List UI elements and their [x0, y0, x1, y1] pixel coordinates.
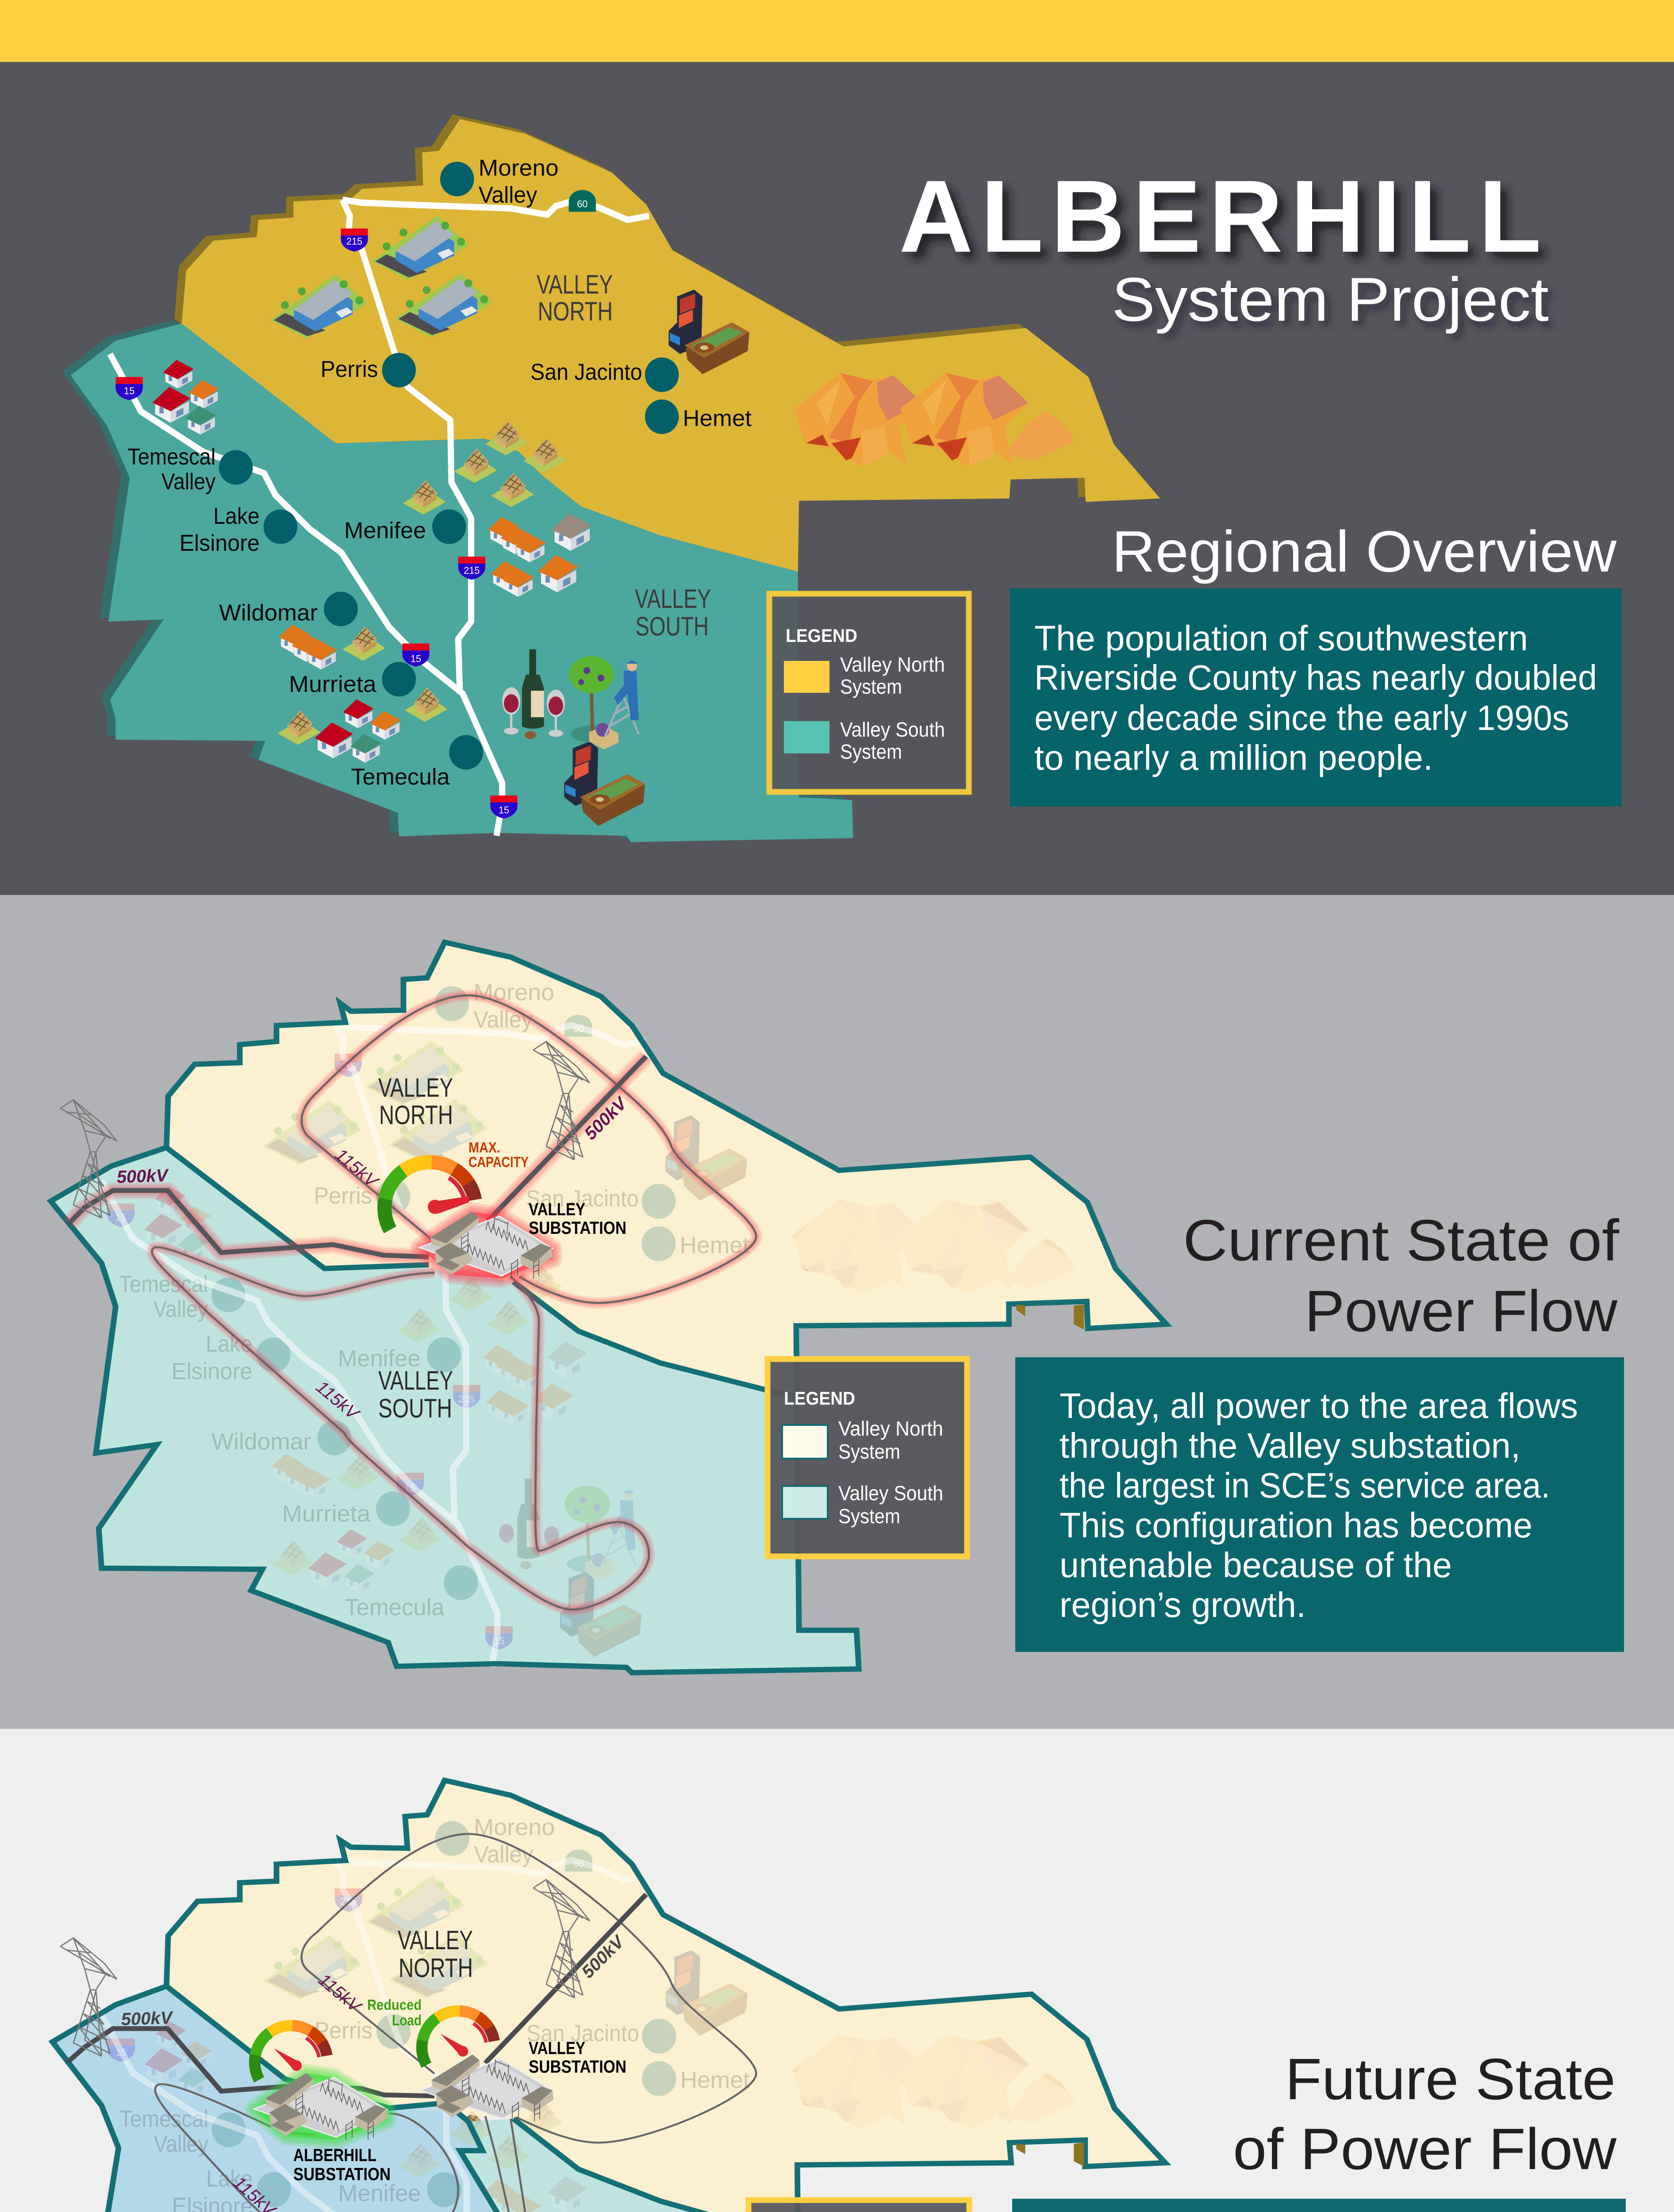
heading: future state — [1233, 2047, 1617, 2181]
faded base map icons and city labels: 15 — [116, 2047, 127, 2058]
highway shield numbers: 15 — [499, 804, 509, 816]
alberhill substation glow — [254, 2073, 387, 2140]
faded base map icons and city labels: San Jacinto — [526, 1186, 639, 1212]
line voltage labels: 115kV — [331, 1145, 382, 1192]
transmission tower west — [60, 1100, 117, 1218]
text block: current state: This configuration has become — [1060, 1505, 1532, 1545]
city labels — [127, 154, 752, 790]
text block: current state — [1015, 1357, 1624, 1652]
transmission tower west — [60, 1938, 117, 2056]
legend: regional overview: Valley North — [840, 653, 945, 676]
reduced load label: Reduced — [367, 1997, 422, 2013]
substation label: SUBSTATION — [529, 1218, 626, 1238]
text block: current state: the largest in SCE’s service area. — [1060, 1466, 1550, 1505]
city labels: Hemet — [683, 405, 752, 431]
legend: regional overview — [769, 594, 969, 792]
top yellow band — [0, 0, 1674, 62]
faded base map icons and city labels: Temecula — [345, 1595, 445, 1621]
map regions base — [51, 942, 1166, 1673]
faded base map icons and city labels: Menifee — [338, 1346, 420, 1372]
faded base map icons and city labels: 15 — [115, 1212, 126, 1223]
valley substation label — [529, 2039, 626, 2077]
faded base map icons and city labels: Moreno — [474, 1814, 555, 1840]
heading: future state: Future State — [1285, 2047, 1616, 2112]
title — [899, 159, 1549, 334]
faded base map icons and city labels: Perris — [314, 1183, 372, 1209]
map region shadows — [62, 115, 1153, 839]
faded base map icons and city labels: 60 — [573, 1858, 584, 1869]
legend: current state: Valley South — [838, 1482, 943, 1505]
region labels: NORTH — [538, 296, 613, 326]
faded base map icons and city labels: Perris — [315, 2018, 372, 2044]
faded base map icons and city labels: Lake — [206, 1331, 252, 1357]
highway shield numbers — [124, 198, 587, 816]
highways — [110, 200, 649, 836]
region labels: VALLEY — [635, 584, 711, 614]
region outlines — [53, 1780, 1165, 2212]
region labels — [537, 269, 711, 641]
legend: regional overview: LEGEND — [786, 625, 857, 646]
500kV lines — [68, 1894, 646, 2096]
faded base map icons and city labels: Elsinore — [172, 1359, 252, 1385]
faded base map icons and city labels — [107, 979, 1076, 1657]
faded base map icons and city labels — [108, 1814, 1077, 2212]
faded base map icons and city labels: 215 — [340, 1061, 356, 1072]
faded base map icons and city labels: Valley — [154, 2131, 208, 2157]
text block: regional overview: The population of southwestern — [1034, 618, 1528, 658]
region labels: VALLEY — [378, 1366, 453, 1395]
city labels: Valley — [479, 182, 537, 207]
title line: Alberhill: ALBERHILL — [899, 159, 1541, 274]
regional overview map — [62, 115, 1160, 842]
city labels: Temescal — [127, 444, 215, 469]
region labels — [378, 1073, 453, 1423]
gauge label — [468, 1139, 529, 1170]
region labels — [169, 1925, 521, 2212]
500kV lines — [69, 1056, 646, 1257]
heading: current state: Current State of — [1183, 1208, 1619, 1273]
city labels: Menifee — [344, 517, 426, 543]
legend: current state: System — [838, 1440, 900, 1463]
text block: current state: through the Valley substation, — [1060, 1426, 1520, 1465]
city labels: Lake — [213, 503, 260, 529]
text block: regional overview: every decade since the early 1990s — [1034, 698, 1569, 737]
line voltage labels: 500kV — [116, 1166, 169, 1187]
extra veil over faded mountains — [788, 1192, 1082, 1308]
heading: future state: of Power Flow — [1233, 2116, 1617, 2181]
alberhill substation label: ALBERHILL — [293, 2146, 376, 2165]
city labels: Wildomar — [219, 599, 318, 626]
region labels: NORTH — [379, 1100, 453, 1130]
text block: current state: region’s growth. — [1060, 1585, 1306, 1624]
faded base map icons and city labels: 60 — [573, 1023, 584, 1034]
city labels: Elsinore — [180, 530, 260, 556]
city markers and map icons — [115, 162, 1075, 826]
text block: current state: untenable because of the — [1060, 1545, 1452, 1585]
legend: current state: LEGEND — [784, 1388, 855, 1409]
faded highways — [101, 1025, 645, 1667]
highway shield numbers: 215 — [464, 565, 480, 576]
alberhill substation — [254, 2073, 387, 2140]
valley substation — [420, 2055, 553, 2121]
faded base map icons and city labels: 215 — [341, 1896, 357, 1907]
line voltage labels: 500kV — [121, 2008, 174, 2029]
highway shield numbers: 15 — [411, 653, 421, 664]
faded base map icons and city labels: Menifee — [338, 2181, 421, 2207]
panel: future state of power flow — [0, 1729, 1674, 2212]
city labels: Temecula — [351, 764, 450, 790]
region outlines — [51, 942, 1166, 1673]
legend: regional overview: Valley South — [840, 718, 945, 741]
faded base map icons and city labels: Valley — [474, 1842, 533, 1868]
valley substation — [419, 1212, 553, 1279]
gauge label: MAX. — [468, 1139, 500, 1156]
city labels: Murrieta — [289, 671, 376, 697]
substation label: VALLEY — [529, 1200, 585, 1219]
text block: regional overview: Riverside County has nearly doubled — [1034, 658, 1597, 697]
faded base map icons and city labels: Lake — [206, 2166, 253, 2192]
legend: future state — [749, 2200, 969, 2212]
gauge label: CAPACITY — [468, 1154, 529, 1170]
text block: regional overview: to nearly a million people. — [1034, 738, 1433, 777]
highway shield numbers: 60 — [577, 198, 587, 209]
valley substation label: VALLEY — [529, 2039, 585, 2058]
subtitle: System Project — [1112, 265, 1549, 334]
faded base map icons and city labels: Temescal — [119, 2106, 208, 2132]
panel: regional overview — [0, 62, 1674, 895]
region labels: VALLEY — [378, 1073, 453, 1102]
gauge: valley — [422, 2011, 494, 2065]
line voltage labels — [116, 1093, 632, 1425]
valley substation label: SUBSTATION — [529, 2057, 626, 2077]
power line glow — [69, 995, 756, 1609]
115kV lines — [152, 995, 756, 1609]
faded base map icons and city labels: Temescal — [119, 1271, 208, 1298]
gauge: alberhill — [255, 2026, 327, 2080]
heading: current state — [1183, 1208, 1619, 1344]
city labels: Perris — [320, 356, 378, 382]
notch details — [1016, 1305, 1084, 1329]
line voltage labels: 115kV — [312, 1377, 363, 1425]
faded base map icons and city labels: San Jacinto — [526, 2021, 639, 2047]
legend: regional overview: System — [840, 740, 902, 763]
city labels: Valley — [161, 468, 215, 494]
substation label — [529, 1200, 626, 1238]
line voltage labels: 500kV — [580, 1093, 632, 1144]
region veils fading the base map — [53, 1780, 1165, 2212]
faded base map icons and city labels: Murrieta — [282, 1501, 370, 1527]
highway shield numbers: 215 — [346, 236, 362, 247]
faded highways — [102, 1859, 646, 2212]
text block: current state: Today, all power to the area flows — [1060, 1386, 1578, 1425]
alberhill substation label — [293, 2146, 391, 2184]
notch details — [1016, 2143, 1084, 2166]
faded base map icons and city labels: Hemet — [680, 2067, 750, 2093]
region labels: SOUTH — [635, 611, 709, 641]
115kV lines — [155, 1834, 756, 2212]
region labels: VALLEY — [398, 1925, 473, 1955]
extra veil over faded mountains — [788, 2027, 1082, 2143]
panel: current state of power flow — [0, 895, 1674, 1729]
map regions base — [53, 1780, 1165, 2212]
legend: current state — [768, 1359, 967, 1556]
faded base map icons and city labels: Moreno — [473, 979, 554, 1006]
city labels: Moreno — [479, 154, 559, 180]
region labels: NORTH — [399, 1953, 473, 1983]
faded base map icons and city labels: Valley — [153, 1296, 208, 1322]
valley south region — [70, 323, 853, 842]
text block: future state — [1012, 2199, 1626, 2212]
text block: regional overview — [1010, 588, 1622, 806]
region veils fading the base map — [51, 942, 1166, 1673]
heading: current state: Power Flow — [1305, 1279, 1618, 1344]
line voltage labels: 500kV — [578, 1931, 629, 1982]
heading: regional overview: Regional Overview — [1112, 519, 1617, 584]
capacity gauge — [384, 1162, 475, 1230]
alberhill substation label: SUBSTATION — [293, 2165, 391, 2184]
faded base map icons and city labels: 215 — [459, 1394, 475, 1405]
faded base map icons and city labels: Hemet — [680, 1233, 749, 1258]
region labels: VALLEY — [537, 269, 613, 300]
legend: current state: System — [838, 1505, 900, 1528]
reduced load label: Load — [392, 2012, 422, 2028]
line voltage labels — [121, 1931, 629, 2212]
highway shield numbers: 15 — [124, 385, 134, 396]
faded base map icons and city labels: 15 — [405, 1482, 415, 1494]
line voltage labels: 115kV — [315, 1970, 365, 2017]
substation glow — [419, 1212, 553, 1279]
transmission tower east — [533, 1041, 590, 1160]
faded base map icons and city labels: Wildomar — [211, 1429, 311, 1455]
legend: regional overview: System — [840, 675, 902, 698]
legend: current state: Valley North — [838, 1417, 943, 1440]
city labels: San Jacinto — [530, 359, 642, 385]
region labels: SOUTH — [378, 1394, 452, 1423]
faded base map icons and city labels: 15 — [494, 1635, 504, 1647]
faded base map icons and city labels: Valley — [473, 1007, 533, 1033]
reduced load label — [367, 1997, 422, 2028]
transmission tower east — [533, 1880, 590, 1998]
valley north region — [182, 119, 1160, 572]
